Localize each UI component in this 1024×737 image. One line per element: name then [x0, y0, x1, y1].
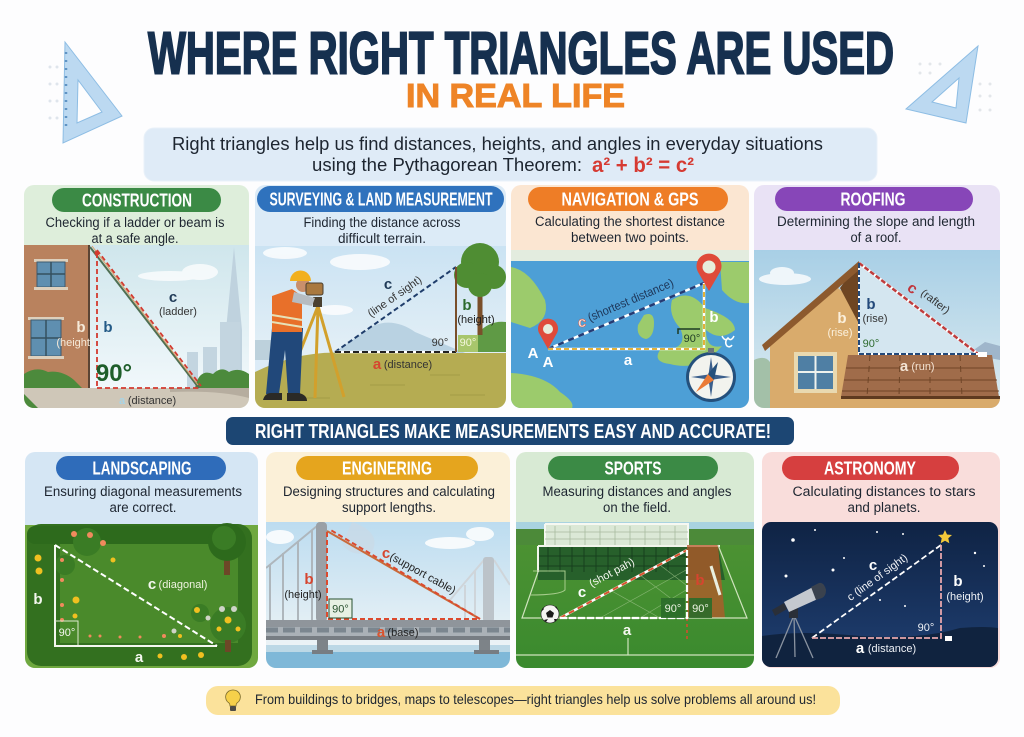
triangle labels: (shot pah): [587, 556, 637, 590]
description: support lengths.: [342, 500, 436, 515]
triangle: ladder: [90, 246, 201, 388]
triangle labels: b: [709, 309, 719, 326]
banner: RIGHT TRIANGLES MAKE MEASUREMENTS EASY AND ACCURATE!: [255, 421, 771, 443]
triangle labels: a: [373, 356, 382, 373]
description: [304, 215, 461, 246]
triangle labels: A: [528, 345, 539, 362]
triangle labels: (support cable): [388, 551, 458, 597]
triangle: line of sight: [335, 267, 456, 352]
illustration: surveyor and tree: [255, 243, 506, 408]
heading: sports: [548, 456, 718, 480]
heading: navigation: NAVIGATION & GPS: [562, 190, 698, 210]
heading: roofing: ROOFING: [840, 190, 906, 210]
description: [792, 484, 976, 515]
description: Calculating distances to stars: [792, 484, 976, 499]
heading: astronomy: ASTRONOMY: [824, 458, 916, 478]
heading: construction: [52, 188, 221, 212]
triangle labels: a: [377, 624, 386, 641]
triangle labels: [578, 556, 712, 639]
triangle: shot path: [560, 550, 687, 618]
triangle labels: (rise): [827, 327, 853, 339]
triangle labels: [528, 276, 734, 371]
triangle labels: 90°: [684, 333, 700, 345]
triangle labels: [827, 279, 952, 375]
triangle: line of sight: [812, 545, 952, 641]
description: of a roof.: [850, 230, 902, 245]
heading: surveying: [257, 186, 504, 212]
description: [777, 214, 975, 245]
footer callout: [206, 686, 840, 715]
heading: engineering: ENGINERING: [342, 458, 432, 478]
heading: landscaping: LANDSCAPING: [92, 458, 192, 478]
panel: astronomy: [762, 452, 1000, 668]
triangle labels: c: [382, 545, 390, 562]
description: difficult terrain.: [338, 231, 426, 246]
heading: surveying: SURVEYING & LAND MEASUREMENT: [270, 190, 492, 210]
triangle labels: (rafter): [918, 287, 952, 317]
panel: landscaping: [25, 452, 258, 668]
triangle labels: c: [578, 314, 586, 331]
triangle labels: a: [623, 622, 632, 639]
intro box: [144, 128, 877, 181]
description: Calculating the shortest distance: [535, 214, 725, 229]
triangle labels: [845, 552, 984, 657]
banner: [226, 417, 794, 445]
triangle labels: (height): [457, 314, 495, 326]
triangle labels: a: [624, 352, 633, 369]
description: [283, 484, 495, 515]
heading: landscaping: [56, 456, 226, 480]
triangle labels: (shortest distance): [586, 276, 676, 324]
heading: sports: SPORTS: [604, 458, 662, 478]
triangle labels: (run): [911, 361, 935, 373]
triangle labels: 90°: [692, 603, 709, 615]
triangle labels: [284, 545, 458, 641]
triangle labels: a: [856, 640, 865, 657]
description: Designing structures and calculating: [283, 484, 495, 499]
heading: astronomy: [782, 456, 959, 480]
panel: navigation and GPS: [511, 185, 749, 408]
triangle labels: b: [103, 319, 113, 336]
triangle labels: a: [119, 395, 126, 407]
triangle labels: 90°: [332, 604, 349, 616]
description: between two points.: [571, 230, 689, 245]
footer text: From buildings to bridges, maps to telescopes—right triangles help us solve problems all around us!: [255, 691, 816, 707]
triangle labels: 90°: [59, 627, 75, 639]
triangle labels: [366, 274, 495, 373]
description: Finding the distance across: [304, 215, 461, 230]
triangle labels: 90°: [432, 337, 448, 349]
triangle labels: 90°: [96, 360, 132, 387]
triangle labels: b: [462, 297, 472, 314]
description: Determining the slope and length: [777, 214, 975, 229]
icon: star: [938, 530, 952, 543]
description: and planets.: [848, 500, 920, 515]
intro box: using the Pythagorean Theorem:: [312, 154, 582, 175]
triangle labels: c: [869, 557, 877, 574]
description: on the field.: [603, 500, 671, 515]
description: Measuring distances and angles: [542, 484, 732, 499]
illustration: soccer field: [516, 522, 754, 668]
description: at a safe angle.: [92, 231, 178, 246]
triangle labels: (base): [387, 627, 419, 639]
icon: compass: [686, 348, 736, 402]
panel: roofing: [754, 185, 1000, 408]
panel: surveying and land measurement: [255, 185, 506, 408]
triangle labels: a: [900, 358, 909, 375]
triangle labels: a: [135, 649, 144, 666]
triangle labels: c: [904, 279, 921, 298]
triangle: diagonal: [55, 545, 217, 646]
triangle labels: (diagonal): [159, 579, 207, 591]
triangle labels: (ladder): [159, 306, 197, 318]
triangle labels: 90°: [918, 622, 934, 634]
panel: sports: [516, 452, 754, 668]
triangle labels: [33, 576, 207, 666]
illustration: night sky: [762, 522, 998, 667]
triangle labels: b: [953, 573, 963, 590]
panel: engineering: [266, 452, 511, 668]
description: [46, 215, 225, 246]
triangle labels: c: [169, 289, 177, 306]
triangle labels: 90°: [460, 337, 476, 349]
triangle: shortest distance: [548, 283, 704, 349]
triangle labels: b: [76, 319, 86, 336]
description: [535, 214, 725, 245]
triangle labels: 90°: [665, 603, 681, 615]
triangle labels: (height): [946, 591, 984, 603]
triangle labels: A: [543, 354, 554, 371]
triangle: support cable: [327, 529, 480, 619]
illustration: map: [511, 250, 749, 408]
triangle labels: (height): [284, 589, 322, 601]
description: Ensuring diagonal measurements: [44, 484, 242, 499]
panel: construction: [24, 185, 249, 408]
illustration: ladder against building: [24, 245, 249, 408]
subtitle: IN REAL LIFE: [406, 77, 625, 114]
triangle labels: c (line of sight): [845, 552, 910, 604]
icon: surveyor with tripod: [263, 270, 344, 401]
triangle labels: (distance): [128, 395, 176, 407]
heading: engineering: [296, 456, 478, 480]
illustration: bridge: [266, 522, 511, 668]
heading: navigation: [528, 187, 728, 211]
intro box: Right triangles help us find distances, heights, and angles in everyday situations: [172, 133, 823, 154]
formula: a² + b² = c²: [592, 154, 694, 177]
illustration: house: [754, 250, 1000, 408]
triangle: rafter: [859, 263, 987, 357]
triangle labels: 90°: [863, 338, 879, 350]
icon: soccer ball: [541, 605, 559, 623]
triangle labels: b: [304, 571, 314, 588]
triangle labels: [56, 289, 197, 407]
triangle labels: (distance): [384, 359, 432, 371]
triangle labels: b: [866, 296, 876, 313]
heading: roofing: [775, 187, 973, 211]
description: [44, 484, 242, 515]
description: Checking if a ladder or beam is: [46, 215, 225, 230]
triangle labels: (distance): [868, 643, 916, 655]
decorative set square: left: [48, 42, 122, 143]
triangle labels: (line of sight): [366, 274, 424, 320]
triangle labels: b: [837, 310, 847, 327]
illustration: garden: [25, 523, 258, 668]
triangle labels: c: [384, 276, 392, 293]
triangle labels: c: [578, 584, 586, 601]
triangle labels: b: [33, 591, 43, 608]
icon: telescope: [772, 583, 826, 658]
icon: pin A: [538, 319, 558, 349]
description: [542, 484, 732, 515]
icon: pin B: [696, 254, 722, 291]
icon: light bulb: [226, 690, 240, 711]
triangle labels: b: [695, 572, 705, 589]
decorative set square: right: [906, 46, 992, 123]
triangle labels: c: [148, 576, 156, 593]
triangle labels: (rise): [862, 313, 888, 325]
triangle labels: (height): [56, 337, 94, 349]
description: are correct.: [110, 500, 176, 515]
heading: construction: CONSTRUCTION: [82, 190, 192, 210]
